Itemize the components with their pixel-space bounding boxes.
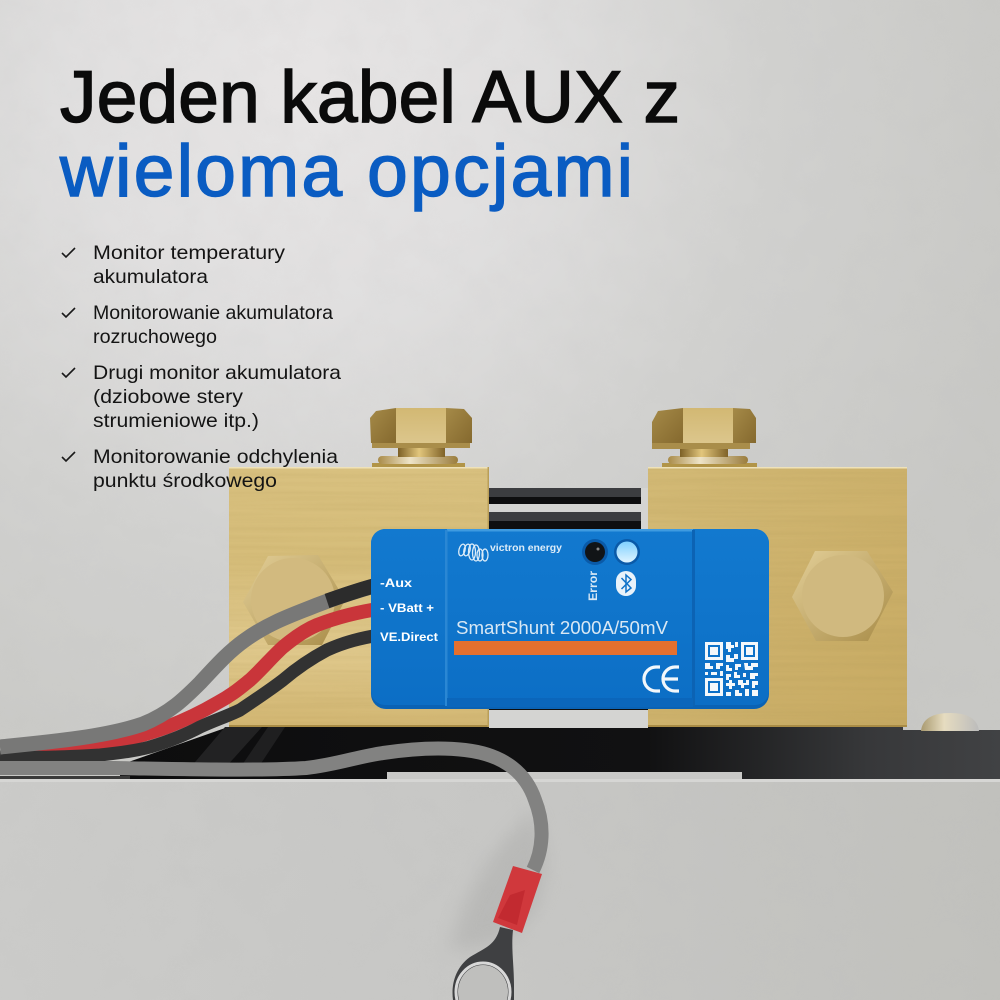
- title: wieloma opcjami: [59, 131, 633, 212]
- left brass block: [229, 467, 489, 727]
- bluetooth icon: [616, 571, 636, 596]
- item: midpoint deviation monitoring: punktu środkowego: [93, 470, 277, 492]
- ledge: lower concrete block: [0, 779, 1000, 1000]
- title: Jeden kabel AUX z: [60, 57, 680, 138]
- screw on plate: [921, 713, 979, 731]
- bluetooth LED: [614, 539, 640, 565]
- product name: SmartShunt 2000A/50mV: [456, 618, 668, 638]
- port labels: -Aux: [380, 578, 413, 590]
- orange bar: [454, 641, 677, 655]
- item: second battery monitor: Drugi monitor akumulatora: [93, 362, 341, 384]
- error LED: [582, 539, 608, 565]
- item: second battery monitor: [62, 362, 341, 432]
- port labels: - VBatt +: [380, 603, 434, 615]
- red crimp sleeve: [493, 866, 542, 933]
- CE mark: [644, 667, 679, 691]
- item: midpoint deviation monitoring: [62, 446, 338, 492]
- right brass block: [648, 467, 907, 727]
- error label: Error: [586, 571, 600, 601]
- item: temperature monitor: Monitor temperatury: [93, 242, 285, 264]
- shunt element strips: [489, 488, 648, 728]
- title: [59, 57, 680, 212]
- feature list: [62, 242, 341, 492]
- item: midpoint deviation monitoring: Monitorowanie odchylenia: [93, 446, 338, 468]
- right terminal bolt: [652, 408, 757, 467]
- right face hex bolt: [792, 551, 893, 641]
- item: starter battery monitoring: [62, 302, 333, 348]
- QR code: [705, 642, 758, 696]
- SmartShunt module: [371, 529, 769, 709]
- victron energy logo: [458, 542, 562, 561]
- item: temperature monitor: akumulatora: [93, 266, 208, 288]
- item: second battery monitor: (dziobowe stery: [93, 386, 243, 408]
- left terminal bolt: [370, 408, 472, 467]
- victron energy logo: victron energy: [490, 542, 562, 554]
- item: second battery monitor: strumieniowe itp.): [93, 410, 259, 432]
- cables: grey, red, black: [0, 583, 542, 870]
- item: temperature monitor: [62, 242, 285, 288]
- ring terminal: [453, 927, 514, 1000]
- port labels: VE.Direct: [380, 632, 438, 644]
- item: starter battery monitoring: rozruchowego: [93, 326, 217, 348]
- item: starter battery monitoring: Monitorowanie akumulatora: [93, 302, 333, 324]
- mounting plate: [0, 727, 1000, 779]
- port labels: [380, 578, 438, 644]
- left face hex bolt: [243, 555, 345, 645]
